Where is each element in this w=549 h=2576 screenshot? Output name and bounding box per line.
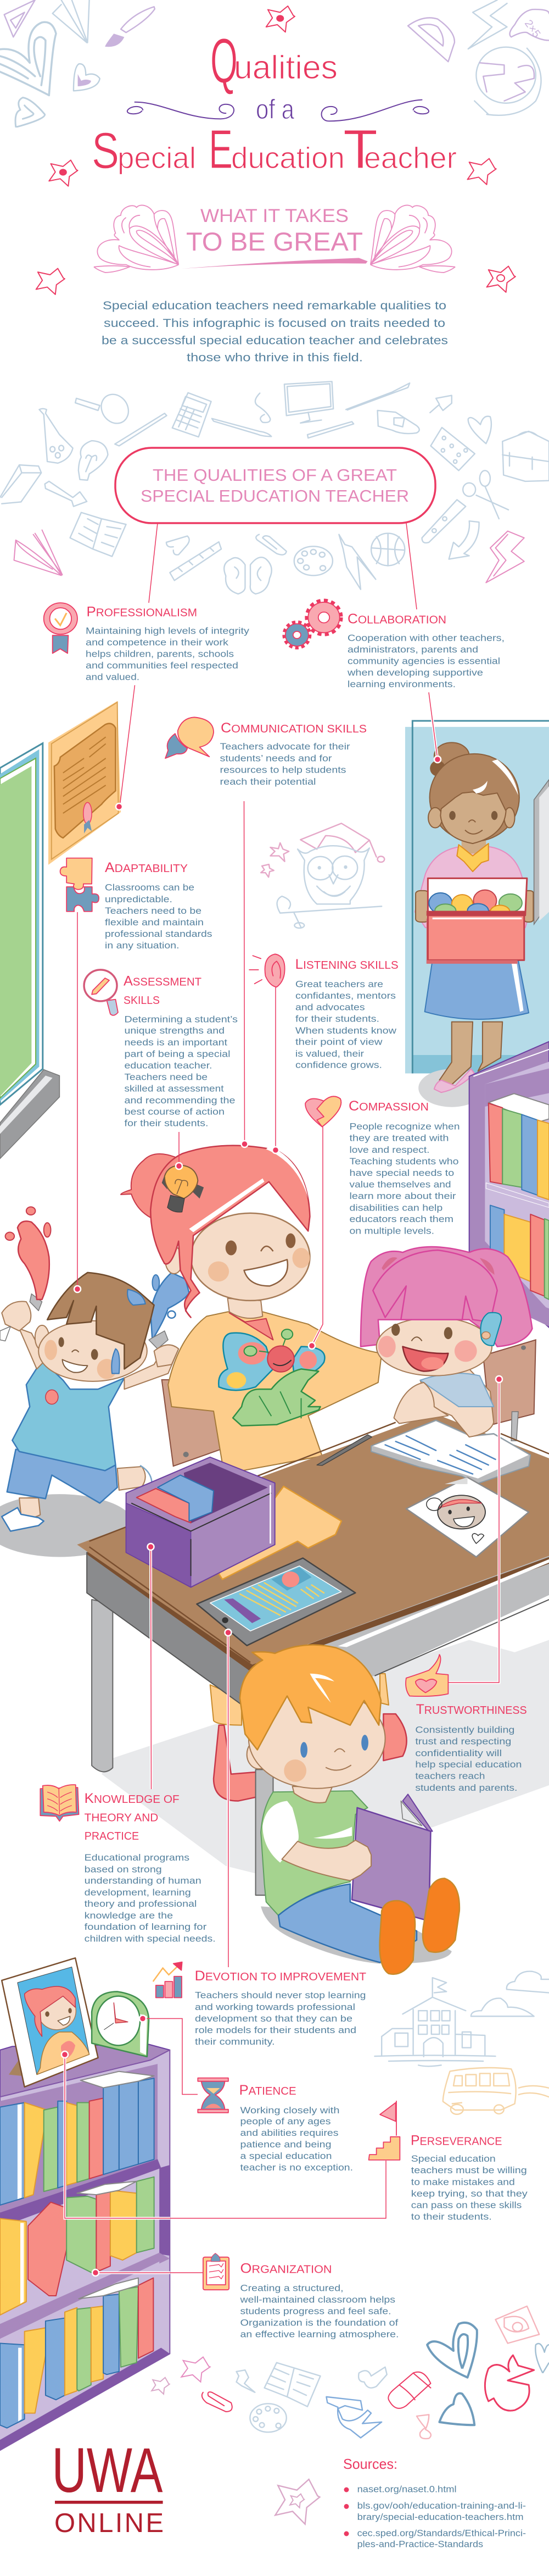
icon: heart with hand [305, 1096, 341, 1127]
text: patience description [240, 2105, 353, 2173]
text: patience description: Working closely with [240, 2105, 339, 2116]
source links: ples-and-Practice-Standards [357, 2539, 483, 2550]
heading: perseverance: PERSEVERANCE [411, 2133, 502, 2148]
text: collaboration description: when developing supportive [347, 667, 483, 678]
speech bubble doodle label: 2×5 [522, 18, 542, 40]
bookshelf on the right [469, 1042, 549, 1328]
source links [357, 2484, 526, 2550]
sources list [343, 2456, 526, 2550]
text: patience description: people of any ages [240, 2116, 330, 2127]
seated boy's shadow [0, 1494, 135, 1557]
text: knowledge description [85, 1852, 216, 1944]
panel: communication skills [165, 717, 367, 787]
panel: knowledge of theory and practice [40, 1785, 216, 1944]
text: organization description: Creating a structured, [240, 2283, 344, 2293]
intro paragraph [102, 299, 448, 364]
bus doodle [443, 2068, 549, 2114]
text: assessment description: needs is an important [124, 1037, 227, 1047]
text: compassion description: love and respect. [349, 1145, 429, 1155]
panel: patience [198, 2078, 353, 2173]
text: compassion description: disabilities can help [349, 1202, 442, 1213]
panel: collaboration [284, 601, 505, 690]
butterfly hand puppet [219, 1329, 324, 1426]
teacher's body [168, 1298, 382, 1474]
heading: knowledge of theory and practice: THEORY AND [85, 1812, 158, 1824]
text: assessment description: Determining a student’s [124, 1014, 238, 1024]
title: Q [210, 26, 238, 96]
text: professionalism description [86, 625, 250, 682]
owl doodle with graduation cap [261, 823, 384, 928]
title: pecial [117, 141, 196, 175]
icon: ear [249, 954, 285, 987]
icon: speech bubbles [165, 717, 214, 758]
text: adaptability description: Teachers need to be [105, 906, 201, 916]
text: perseverance description: keep trying, so that they [411, 2188, 528, 2199]
source links: cec.sped.org/Standards/Ethical-Princi- [357, 2528, 526, 2539]
pen, book and drawing on desk [317, 1420, 530, 1557]
icon: flag on stairs [369, 2101, 400, 2160]
text: listening description: When students know [295, 1025, 397, 1036]
text: patience description: a special education [240, 2151, 332, 2161]
heading: assessment skills [124, 974, 201, 1007]
icon: gears [284, 601, 341, 647]
icon: magnifying glass with pencil [84, 970, 118, 1015]
text: listening description [295, 979, 397, 1070]
heading: organization: ORGANIZATION [240, 2261, 332, 2276]
text: adaptability description: flexible and maintain [105, 917, 204, 928]
text: devotion description: role models for their students and [195, 2025, 356, 2035]
text: assessment description [124, 1014, 238, 1128]
title flourishes [127, 100, 429, 121]
text: trustworthiness description [415, 1724, 522, 1793]
text: professionalism description: helps children, parents, schools [86, 648, 234, 659]
text: communication description [220, 741, 350, 787]
panel: compassion [305, 1096, 460, 1236]
text: listening description: is valued, their [295, 1048, 364, 1059]
header doodles: right group [408, 0, 549, 115]
text: compassion description [349, 1121, 460, 1236]
text: trustworthiness description: confidentiality will [415, 1748, 502, 1758]
lower bookshelf [0, 2044, 170, 2450]
heading: patience: PATIENCE [239, 2083, 296, 2098]
text: assessment description: skilled at assessment [124, 1084, 224, 1093]
panel: devotion to improvement [153, 1962, 366, 2047]
text: knowledge description: Educational programs [85, 1852, 189, 1863]
heading: assessment skills: ASSESSMENT [124, 974, 201, 989]
text: organization description: students progress and feel safe. [240, 2306, 391, 2317]
text: adaptability description: professional standards [105, 929, 212, 939]
pill heading: the qualities of a great special education teacher [115, 448, 435, 523]
woman holding a basket [415, 742, 533, 1107]
text: assessment description: for their students. [124, 1118, 209, 1128]
teacher's head [121, 1146, 310, 1318]
title [92, 26, 457, 180]
text: knowledge description: foundation of learning for [85, 1922, 207, 1932]
text: collaboration description: Cooperation with other teachers, [348, 633, 505, 643]
panel: organization [203, 2253, 399, 2340]
text: devotion description: development so that they can be [195, 2013, 352, 2024]
text: trustworthiness description: students and parents. [415, 1783, 517, 1793]
text: knowledge description: based on strong [85, 1864, 162, 1874]
text: perseverance description: to their students. [411, 2212, 492, 2222]
student with paintbrush: head [35, 1273, 154, 1381]
text: compassion description: educators reach them [349, 1214, 453, 1224]
panel: adaptability [60, 858, 212, 951]
text: listening description: confidence grows. [295, 1060, 382, 1070]
student chair back [483, 1340, 536, 1441]
text: patience description: teacher is no exception. [240, 2162, 353, 2173]
school supplies doodle cloud [0, 381, 549, 594]
heading: devotion to improvement: DEVOTION TO IMPROVEMENT [195, 1968, 366, 1984]
text: organization description: Organization is the foundation of [240, 2318, 399, 2328]
connector end dots [61, 756, 502, 2276]
connector lines [65, 523, 499, 2273]
text: organization description [239, 2283, 399, 2340]
text: perseverance description: teachers must be willing [411, 2165, 527, 2175]
logo: UWA Online: UWA [52, 2435, 163, 2506]
what it takes wings [94, 205, 455, 273]
title: T [343, 119, 378, 180]
text: perseverance description: can pass on these skills [411, 2200, 522, 2210]
student with paintbrush: body [0, 1207, 189, 1531]
text: professionalism description: Maintaining high levels of integrity [86, 625, 250, 636]
boy reading [214, 1714, 460, 1974]
panel: assessment skills [84, 970, 238, 1128]
intro paragraph: succeed. This infographic is focused on traits needed to [104, 317, 445, 330]
text: listening description: their point of view [295, 1037, 383, 1047]
title: of a [256, 94, 294, 125]
heading: what it takes to be great [186, 206, 363, 256]
text: perseverance description: to make mistakes and [411, 2177, 515, 2187]
panel: perseverance [369, 2101, 528, 2222]
heading: what it takes to be great: WHAT IT TAKES [200, 206, 349, 226]
desk [77, 1413, 549, 1772]
text: collaboration description: learning environments. [348, 679, 456, 690]
text: devotion description: and working towards professional [195, 2002, 355, 2012]
text: professionalism description: and competence in their work [86, 637, 229, 648]
text: compassion description: have special needs to [349, 1168, 454, 1178]
source links: naset.org/naset.0.html [357, 2484, 457, 2495]
picture frame [2, 1958, 98, 2087]
title: E [209, 119, 233, 180]
clock [92, 1991, 149, 2057]
text: assessment description: education teacher. [124, 1061, 212, 1070]
heading: communication skills: COMMUNICATION SKILLS [221, 720, 367, 736]
intro paragraph: be a successful special education teacher and celebrates [102, 334, 448, 347]
text: listening description: confidantes, mentors [295, 990, 396, 1001]
hair clip light bulb [162, 1165, 204, 1212]
text: assessment description: best course of action [124, 1107, 225, 1117]
text: trustworthiness description: trust and respecting [415, 1736, 511, 1747]
floor shadow [102, 1640, 549, 1884]
text: perseverance description: Special education [411, 2153, 496, 2164]
icon: open book [40, 1785, 79, 1821]
icon: award ribbon [44, 603, 77, 653]
footer doodles [152, 2306, 549, 2524]
heading: knowledge of theory and practice [85, 1791, 180, 1842]
header doodles: left group [0, 0, 155, 127]
boy's head [240, 1645, 385, 1789]
icon: hourglass [198, 2078, 228, 2113]
text: perseverance description [411, 2153, 528, 2222]
text: knowledge description: knowledge are the [85, 1910, 173, 1920]
panel: professionalism [44, 603, 250, 682]
bullets [344, 2487, 349, 2536]
text: communication description: reach their potential [220, 776, 316, 787]
cloud doodles [471, 1972, 549, 2016]
icon: rising bar chart [153, 1962, 182, 1998]
text: listening description: Great teachers are [295, 979, 383, 989]
teacher's chair back [162, 1380, 224, 1466]
middle row [0, 2218, 26, 2315]
text: trustworthiness description: teachers reach [415, 1770, 485, 1781]
text: collaboration description [347, 633, 505, 690]
text: adaptability description: Classrooms can be [105, 882, 194, 892]
text: adaptability description: in any situation. [105, 940, 179, 951]
source links: brary/special-education-teachers.htm [357, 2512, 524, 2522]
text: knowledge description: children with special needs. [85, 1933, 216, 1944]
text: organization description: well-maintained classroom helps [239, 2294, 395, 2305]
school doodle [374, 1978, 495, 2066]
text: listening description: and advocates [295, 1002, 365, 1012]
top row [0, 2102, 25, 2205]
text: patience description: patience and being [240, 2139, 332, 2150]
panel: trustworthiness [406, 1655, 527, 1793]
text: adaptability description [105, 882, 212, 951]
heading: collaboration: COLLABORATION [348, 612, 446, 627]
pill heading: the qualities of a great special education teacher: THE QUALITIES OF A GREAT [153, 465, 397, 485]
text: collaboration description: administrators, parents and [348, 644, 478, 654]
text: compassion description: on multiple levels. [349, 1225, 434, 1236]
logo: UWA Online [52, 2435, 164, 2538]
text: communication description: resources to help students [220, 765, 346, 775]
heading: what it takes to be great: TO BE GREAT [186, 227, 363, 256]
text: knowledge description: understanding of human [85, 1875, 201, 1886]
text: trustworthiness description: Consistently building [415, 1724, 514, 1735]
text: knowledge description: development, learning [85, 1887, 191, 1897]
bottom row [0, 2344, 25, 2428]
classroom door [405, 721, 549, 1073]
text: compassion description: learn more about their [349, 1191, 456, 1201]
intro paragraph: Special education teachers need remarkable qualities to [103, 299, 446, 312]
heading: trustworthiness: TRUSTWORTHINESS [416, 1702, 527, 1717]
heading: professionalism: PROFESSIONALISM [87, 604, 197, 620]
storage box and folder [126, 1457, 341, 1587]
text: compassion description: People recognize when [349, 1121, 460, 1132]
text: compassion description: value themselves and [349, 1179, 451, 1190]
title: S [92, 122, 119, 179]
text: knowledge description: theory and professional [85, 1898, 197, 1909]
tablet [197, 1558, 355, 1646]
title: ducation [231, 141, 345, 175]
blackboard on the wall [0, 743, 59, 1159]
text: organization description: an effective learning atmosphere. [240, 2329, 399, 2340]
icon: thumbs up with heart [406, 1655, 448, 1696]
logo: UWA Online: ONLINE [54, 2508, 164, 2538]
text: assessment description: and recommending the [124, 1095, 235, 1106]
text: assessment description: Teachers need be [124, 1072, 208, 1082]
text: communication description: students’ needs and for [220, 753, 332, 763]
text: devotion description: Teachers should never stop learning [195, 1990, 366, 2001]
text: compassion description: they are treated with [349, 1133, 449, 1143]
heading: listening skills: LISTENING SKILLS [295, 957, 399, 972]
text: collaboration description: community agencies is essential [348, 656, 500, 667]
pill heading: the qualities of a great special education teacher: SPECIAL EDUCATION TEACHER [141, 486, 409, 506]
text: trustworthiness description: help special education [415, 1759, 522, 1770]
panel: listening skills [249, 954, 399, 1070]
diploma on the wall [48, 701, 121, 865]
title stars [36, 6, 516, 295]
icon: clipboard checklist [203, 2253, 229, 2290]
text: patience description: and abilities requires [240, 2128, 338, 2138]
text: devotion description [195, 1990, 366, 2047]
title: ualities [234, 49, 338, 86]
heading: assessment skills: SKILLS [124, 995, 160, 1007]
text: listening description: for their students. [295, 1014, 379, 1024]
text: assessment description: part of being a special [124, 1049, 231, 1059]
heading: knowledge of theory and practice: PRACTICE [85, 1830, 139, 1842]
source links: bls.gov/ooh/education-training-and-li- [357, 2501, 526, 2511]
intro paragraph: those who thrive in this field. [187, 351, 363, 364]
heading: compassion: COMPASSION [349, 1098, 429, 1114]
text: professionalism description: and communities feel respected [86, 660, 238, 671]
heading: sources: Sources: [343, 2456, 397, 2472]
student with pink pigtails [361, 1247, 532, 1437]
text: compassion description: Teaching students who [349, 1156, 459, 1167]
icon: puzzle pieces [60, 858, 99, 912]
text: communication description: Teachers advocate for their [220, 741, 350, 752]
heading: adaptability: ADAPTABILITY [105, 860, 188, 875]
title: eacher [364, 141, 457, 175]
text: assessment description: unique strengths and [124, 1025, 225, 1036]
text: adaptability description: unpredictable. [105, 894, 172, 904]
text: professionalism description: and valued. [86, 671, 139, 682]
heading: knowledge of theory and practice: KNOWLEDGE OF [85, 1791, 180, 1806]
text: devotion description: their community. [195, 2036, 275, 2047]
